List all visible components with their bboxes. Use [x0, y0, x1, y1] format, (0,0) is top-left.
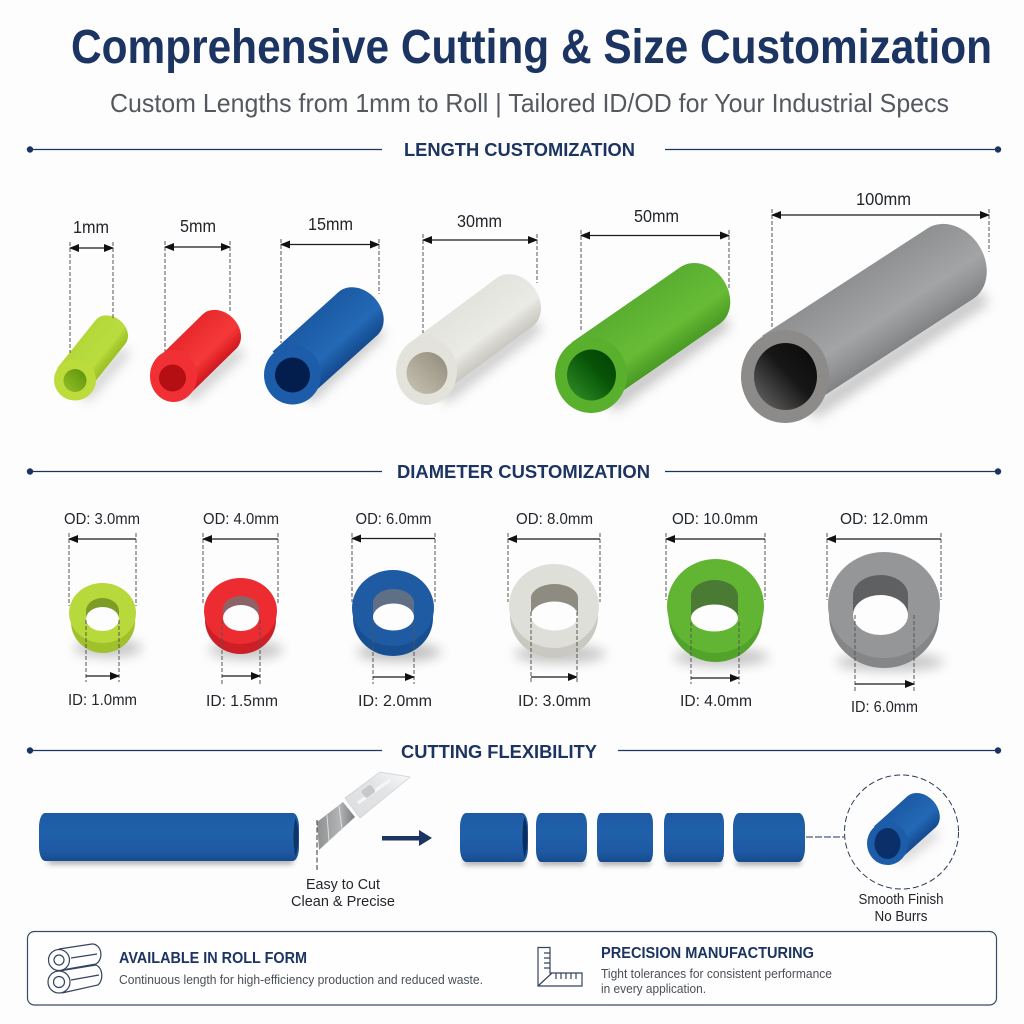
- section heading: cutting flexibility: CUTTING FLEXIBILITY: [401, 741, 598, 762]
- panel: bottom features: [28, 932, 996, 1005]
- tube 50mm green: [555, 251, 743, 413]
- icon: rolls: [48, 944, 102, 993]
- ring: 12.0mm gray: [827, 511, 944, 716]
- ring: 3.0mm lime: [64, 511, 142, 709]
- ring: 4.0mm red: ID: 1.5mm: [206, 693, 278, 710]
- text: precision manufacturing: Tight tolerances for consistent performance: [601, 966, 832, 981]
- dimension: 15mm: 15mm: [308, 214, 353, 234]
- ring: 6.0mm blue: OD: 6.0mm: [356, 511, 432, 528]
- ring: 3.0mm lime: ID: 1.0mm: [68, 692, 137, 709]
- ring: 8.0mm white: ID: 3.0mm: [518, 693, 591, 710]
- ring: 4.0mm red: [203, 511, 283, 710]
- section heading: cutting flexibility: [27, 741, 1001, 762]
- ring: 6.0mm blue: ID: 2.0mm: [358, 693, 432, 710]
- long uncut blue tube: [39, 813, 299, 864]
- dimension: 5mm: [165, 216, 230, 352]
- text: precision manufacturing: in every application.: [601, 981, 706, 996]
- ring: 8.0mm white: OD: 8.0mm: [516, 511, 593, 528]
- dimension: 15mm: [281, 214, 379, 343]
- section heading: length customization: [27, 139, 1001, 160]
- ring: 4.0mm red: OD: 4.0mm: [203, 511, 279, 528]
- dimension: 50mm: 50mm: [634, 206, 679, 226]
- text: available in roll form: Continuous length for high-efficiency production and reduced waste.: [119, 972, 483, 987]
- tube 30mm white: [396, 264, 552, 405]
- ring: 8.0mm white: [508, 511, 606, 710]
- icon: utility knife: [317, 772, 410, 870]
- tube 1mm lime: [54, 308, 135, 400]
- icon: ruler: [538, 948, 582, 986]
- callout: smooth finish detail: No Burrs: [874, 909, 928, 925]
- cut blue pieces: [460, 813, 805, 865]
- label: easy to cut: Easy to Cut: [306, 876, 381, 893]
- text: precision manufacturing: PRECISION MANUFACTURING: [601, 945, 814, 962]
- section heading: diameter customization: DIAMETER CUSTOMIZATION: [397, 461, 650, 482]
- panel: length tubes: [54, 210, 1002, 423]
- ring: 10.0mm green: ID: 4.0mm: [680, 693, 752, 710]
- dimension: 50mm: [581, 206, 729, 332]
- ring: 10.0mm green: [666, 511, 769, 710]
- ring: 12.0mm gray: OD: 12.0mm: [840, 511, 928, 528]
- dimension: 1mm: 1mm: [73, 217, 109, 237]
- ring: 12.0mm gray: ID: 6.0mm: [851, 699, 918, 716]
- ring: 10.0mm green: OD: 10.0mm: [672, 511, 758, 528]
- callout: smooth finish detail: Smooth Finish: [858, 892, 944, 908]
- callout: smooth finish detail: [806, 775, 958, 925]
- label: easy to cut: Clean & Precise: [291, 893, 395, 910]
- dimension: 30mm: [423, 211, 537, 333]
- subtitle: Custom Lengths from 1mm to Roll | Tailored ID/OD for Your Industrial Specs: [110, 88, 949, 118]
- dimension: 100mm: 100mm: [856, 189, 911, 209]
- section heading: diameter customization: [27, 461, 1001, 482]
- dimension: 5mm: 5mm: [180, 216, 216, 236]
- tube 100mm gray: [741, 210, 1002, 423]
- dimension: 1mm: [70, 217, 113, 353]
- text: precision manufacturing: [601, 945, 832, 996]
- label: easy to cut: [291, 876, 395, 910]
- ring: 3.0mm lime: OD: 3.0mm: [64, 511, 140, 528]
- tube 15mm blue: [264, 277, 394, 404]
- section heading: length customization: LENGTH CUSTOMIZATION: [404, 139, 635, 160]
- arrow: [382, 830, 432, 846]
- tube 5mm red: [150, 301, 250, 402]
- dimension: 100mm: [772, 189, 989, 327]
- text: available in roll form: AVAILABLE IN ROLL FORM: [119, 950, 307, 967]
- text: available in roll form: [119, 950, 483, 987]
- ring: 6.0mm blue: [352, 511, 441, 710]
- dimension: 30mm: 30mm: [457, 211, 502, 231]
